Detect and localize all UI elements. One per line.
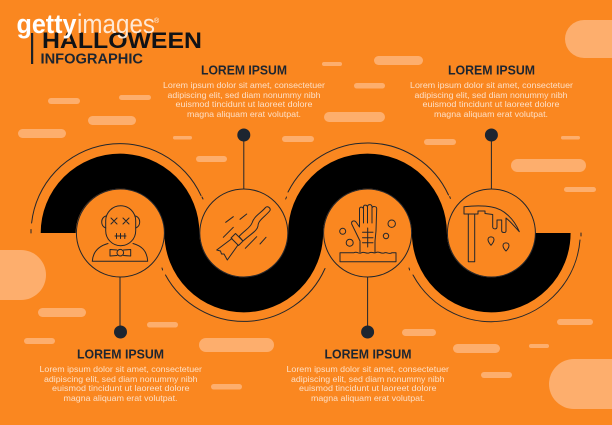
text block: top left: euismod tincidunt ut laoreet dolore [176, 99, 313, 109]
icon circle: zombie hand [324, 189, 412, 277]
text block: top right: magna aliquam erat volutpat. [434, 109, 548, 119]
watermark [16, 9, 160, 39]
text block: bottom left: magna aliquam erat volutpat. [64, 393, 178, 403]
watermark: images [77, 9, 155, 39]
text block: bottom left: euismod tincidunt ut laoreet dolore [52, 383, 190, 393]
text block: top left [163, 64, 325, 119]
text block: bottom left: LOREM IPSUM [77, 348, 164, 362]
text block: bottom right: LOREM IPSUM [324, 348, 412, 362]
text block: bottom left: Lorem ipsum dolor sit amet, consectetuer [40, 364, 202, 374]
text block: top right: LOREM IPSUM [448, 64, 535, 78]
black wave band [58, 171, 553, 295]
icon circle: scythe [447, 189, 535, 277]
text block: bottom left: adipiscing elit, sed diam nonummy nibh [44, 374, 198, 384]
text block: top left: adipiscing elit, sed diam nonummy nibh [168, 90, 321, 100]
text block: bottom right: Lorem ipsum dolor sit amet, consectetuer [286, 364, 449, 374]
text block: top right: Lorem ipsum dolor sit amet, consectetuer [410, 80, 573, 90]
text block: bottom right: magna aliquam erat volutpat. [311, 393, 425, 403]
text block: top left: LOREM IPSUM [201, 64, 287, 78]
text block: bottom right: adipiscing elit, sed diam nonummy nibh [291, 374, 445, 384]
watermark: getty [16, 9, 76, 39]
text block: top right [410, 64, 573, 119]
text block: top left: magna aliquam erat volutpat. [187, 109, 301, 119]
text block: top right: euismod tincidunt ut laoreet dolore [422, 99, 560, 109]
title: INFOGRAPHIC [40, 52, 144, 68]
title [31, 28, 202, 68]
watermark: ® [154, 17, 160, 25]
text block: bottom right [286, 348, 449, 403]
text block: bottom right: euismod tincidunt ut laoreet dolore [299, 383, 437, 393]
text block: top left: Lorem ipsum dolor sit amet, consectetuer [163, 80, 325, 90]
title: HALLOWEEN [42, 28, 202, 53]
thin outline arcs [31, 143, 581, 322]
connector lines and dots [114, 128, 498, 338]
text block: bottom left [40, 348, 202, 403]
icon circle: frankenstein [76, 189, 164, 277]
text block: top right: adipiscing elit, sed diam nonummy nibh [414, 90, 568, 100]
icon circle: broom [200, 189, 288, 277]
